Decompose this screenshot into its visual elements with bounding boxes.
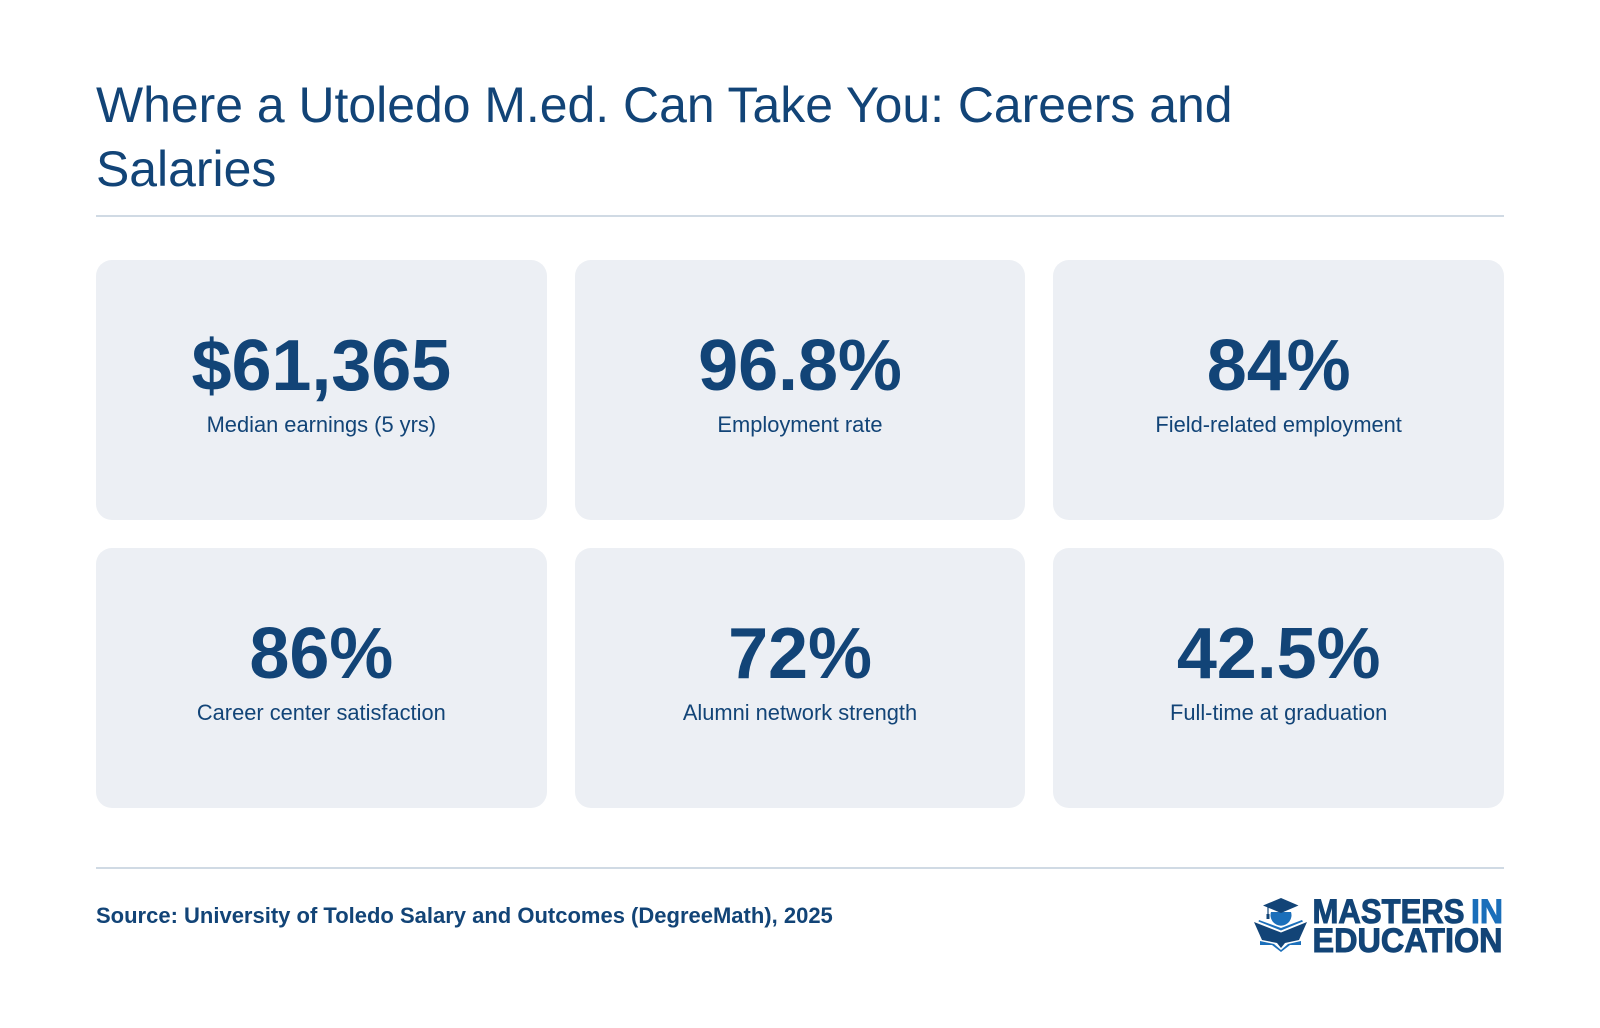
- logo wordmark: [1312, 893, 1503, 960]
- panel: alumni network strength: [575, 548, 1025, 808]
- label: full-time at graduation: Full-time at graduation: [1170, 700, 1387, 725]
- stat: career center value: 86%: [249, 614, 393, 694]
- logo wordmark: MASTERS: [1312, 893, 1464, 931]
- title: Where a Utoledo M.ed. Can Take You: Careers and Salaries: [96, 77, 1233, 197]
- panel: median earnings: [96, 260, 547, 520]
- label: field-related employment: Field-related employment: [1155, 412, 1402, 437]
- panel: career center satisfaction: [96, 548, 547, 808]
- icon: graduation cap on book: [1254, 898, 1307, 952]
- logo wordmark: IN: [1471, 893, 1503, 931]
- logo wordmark: EDUCATION: [1312, 922, 1502, 960]
- stat: field-related value: 84%: [1207, 326, 1351, 406]
- stat: median earnings value: $61,365: [192, 326, 451, 406]
- logo: Masters in Education: [1254, 893, 1503, 960]
- stat: alumni network value: 72%: [728, 614, 872, 694]
- source note: Source: University of Toledo Salary and Outcomes (DegreeMath), 2025: [96, 903, 833, 928]
- stat: full-time value: 42.5%: [1177, 614, 1380, 694]
- label: career center satisfaction: Career center satisfaction: [197, 700, 446, 725]
- panel: employment rate: [575, 260, 1025, 520]
- label: median earnings: Median earnings (5 yrs): [207, 412, 436, 437]
- stat: employment rate value: 96.8%: [698, 326, 902, 406]
- label: employment rate: Employment rate: [717, 412, 883, 437]
- label: alumni network strength: Alumni network strength: [683, 700, 917, 725]
- panel: full-time at graduation: [1053, 548, 1504, 808]
- panel: field-related employment: [1053, 260, 1504, 520]
